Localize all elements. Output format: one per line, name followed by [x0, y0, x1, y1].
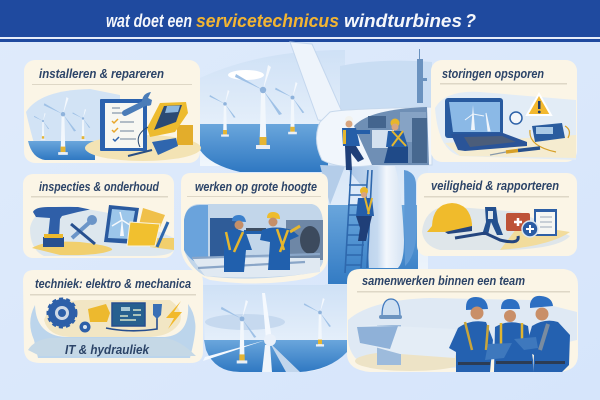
lower blade [320, 165, 345, 205]
title [106, 11, 476, 31]
icon: safety harness [482, 207, 503, 235]
offshore wind scene: central sea [325, 61, 432, 324]
illustration backdrop [348, 298, 577, 368]
icon: lightning bolt [166, 301, 182, 329]
icon: connector [153, 304, 162, 319]
large turbine tower [345, 166, 416, 268]
technician blue helmet [224, 215, 266, 272]
icon: clipboard [534, 209, 557, 236]
icon: clipboard [100, 99, 147, 151]
icon: small gear [80, 322, 90, 332]
panel: inspecties & onderhoud [23, 174, 174, 258]
icon: wrench [125, 103, 145, 113]
illustration: sand [85, 135, 201, 161]
mast on nacelle [417, 49, 427, 103]
heading: installeren & repareren [39, 67, 164, 81]
title: windturbines [344, 11, 462, 31]
panel: techniek: elektro & mechanica [23, 270, 203, 363]
icon: screwdriver and drill [128, 127, 178, 156]
technician right [384, 118, 408, 163]
icon: laptop [445, 98, 527, 151]
icon: yellow box [177, 125, 193, 145]
panel: storingen opsporen [431, 60, 577, 162]
icon: first aid kit [506, 213, 530, 231]
text strip [28, 338, 196, 357]
icon: yellow component [88, 304, 110, 322]
blue swoosh [30, 304, 195, 358]
title: servicetechnicus [196, 11, 339, 31]
icon: tablet [104, 205, 139, 244]
technician yellow helmet [260, 212, 300, 270]
icon: hard hat [427, 203, 472, 234]
icon: screwdriver [490, 148, 540, 155]
ladder with climber [345, 170, 374, 273]
icon: circuit board [112, 303, 145, 326]
heading: techniek: elektro & mechanica [35, 277, 191, 291]
offshore wind scene: upper [200, 50, 403, 172]
foreground turbine [203, 293, 300, 372]
illustration backdrop [422, 206, 570, 250]
illustration backdrop [30, 206, 174, 256]
text strip: IT & hydrauliek [65, 343, 150, 357]
icon: wrench head [142, 92, 152, 106]
icon: multimeter [530, 123, 569, 152]
illustration backdrop [435, 92, 576, 160]
offshore wind scene: lower [203, 285, 347, 372]
illustration: sea and turbines [26, 89, 120, 160]
heading: werken op grote hoogte [195, 180, 317, 194]
technician left [449, 297, 493, 372]
title: wat doet een [106, 11, 192, 31]
work scene [184, 204, 323, 279]
panel: samenwerken binnen een team [347, 269, 578, 372]
radar dome [377, 299, 402, 365]
heading: veiligheid & rapporteren [431, 179, 559, 193]
icon: lanyard [455, 233, 518, 242]
icon: stopwatch [510, 112, 522, 124]
icon: plus badge [522, 221, 538, 237]
heading: storingen opsporen [442, 67, 544, 81]
technician left [342, 116, 370, 170]
icon: drill [33, 207, 90, 247]
sand area [44, 300, 181, 337]
icon: cable [106, 318, 157, 331]
heading: samenwerken binnen een team [362, 274, 525, 288]
nacelle shape [357, 325, 455, 358]
title: ? [465, 11, 476, 31]
icon: large gear [48, 299, 76, 327]
technician middle [485, 299, 533, 372]
nacelle [316, 107, 432, 170]
panel: veiligheid & rapporteren [417, 173, 577, 256]
panel: installeren & repareren [24, 60, 201, 163]
icon: warning triangle [527, 94, 551, 115]
large turbine blade [290, 42, 343, 120]
panel: werken op grote hoogte [181, 173, 328, 284]
header banner [0, 0, 600, 42]
icon: folder and documents [127, 208, 168, 247]
heading: inspecties & onderhoud [39, 180, 159, 194]
icon: multimeter [147, 102, 188, 137]
icon: wrench and screwdriver [71, 215, 97, 244]
technician right [514, 296, 570, 372]
